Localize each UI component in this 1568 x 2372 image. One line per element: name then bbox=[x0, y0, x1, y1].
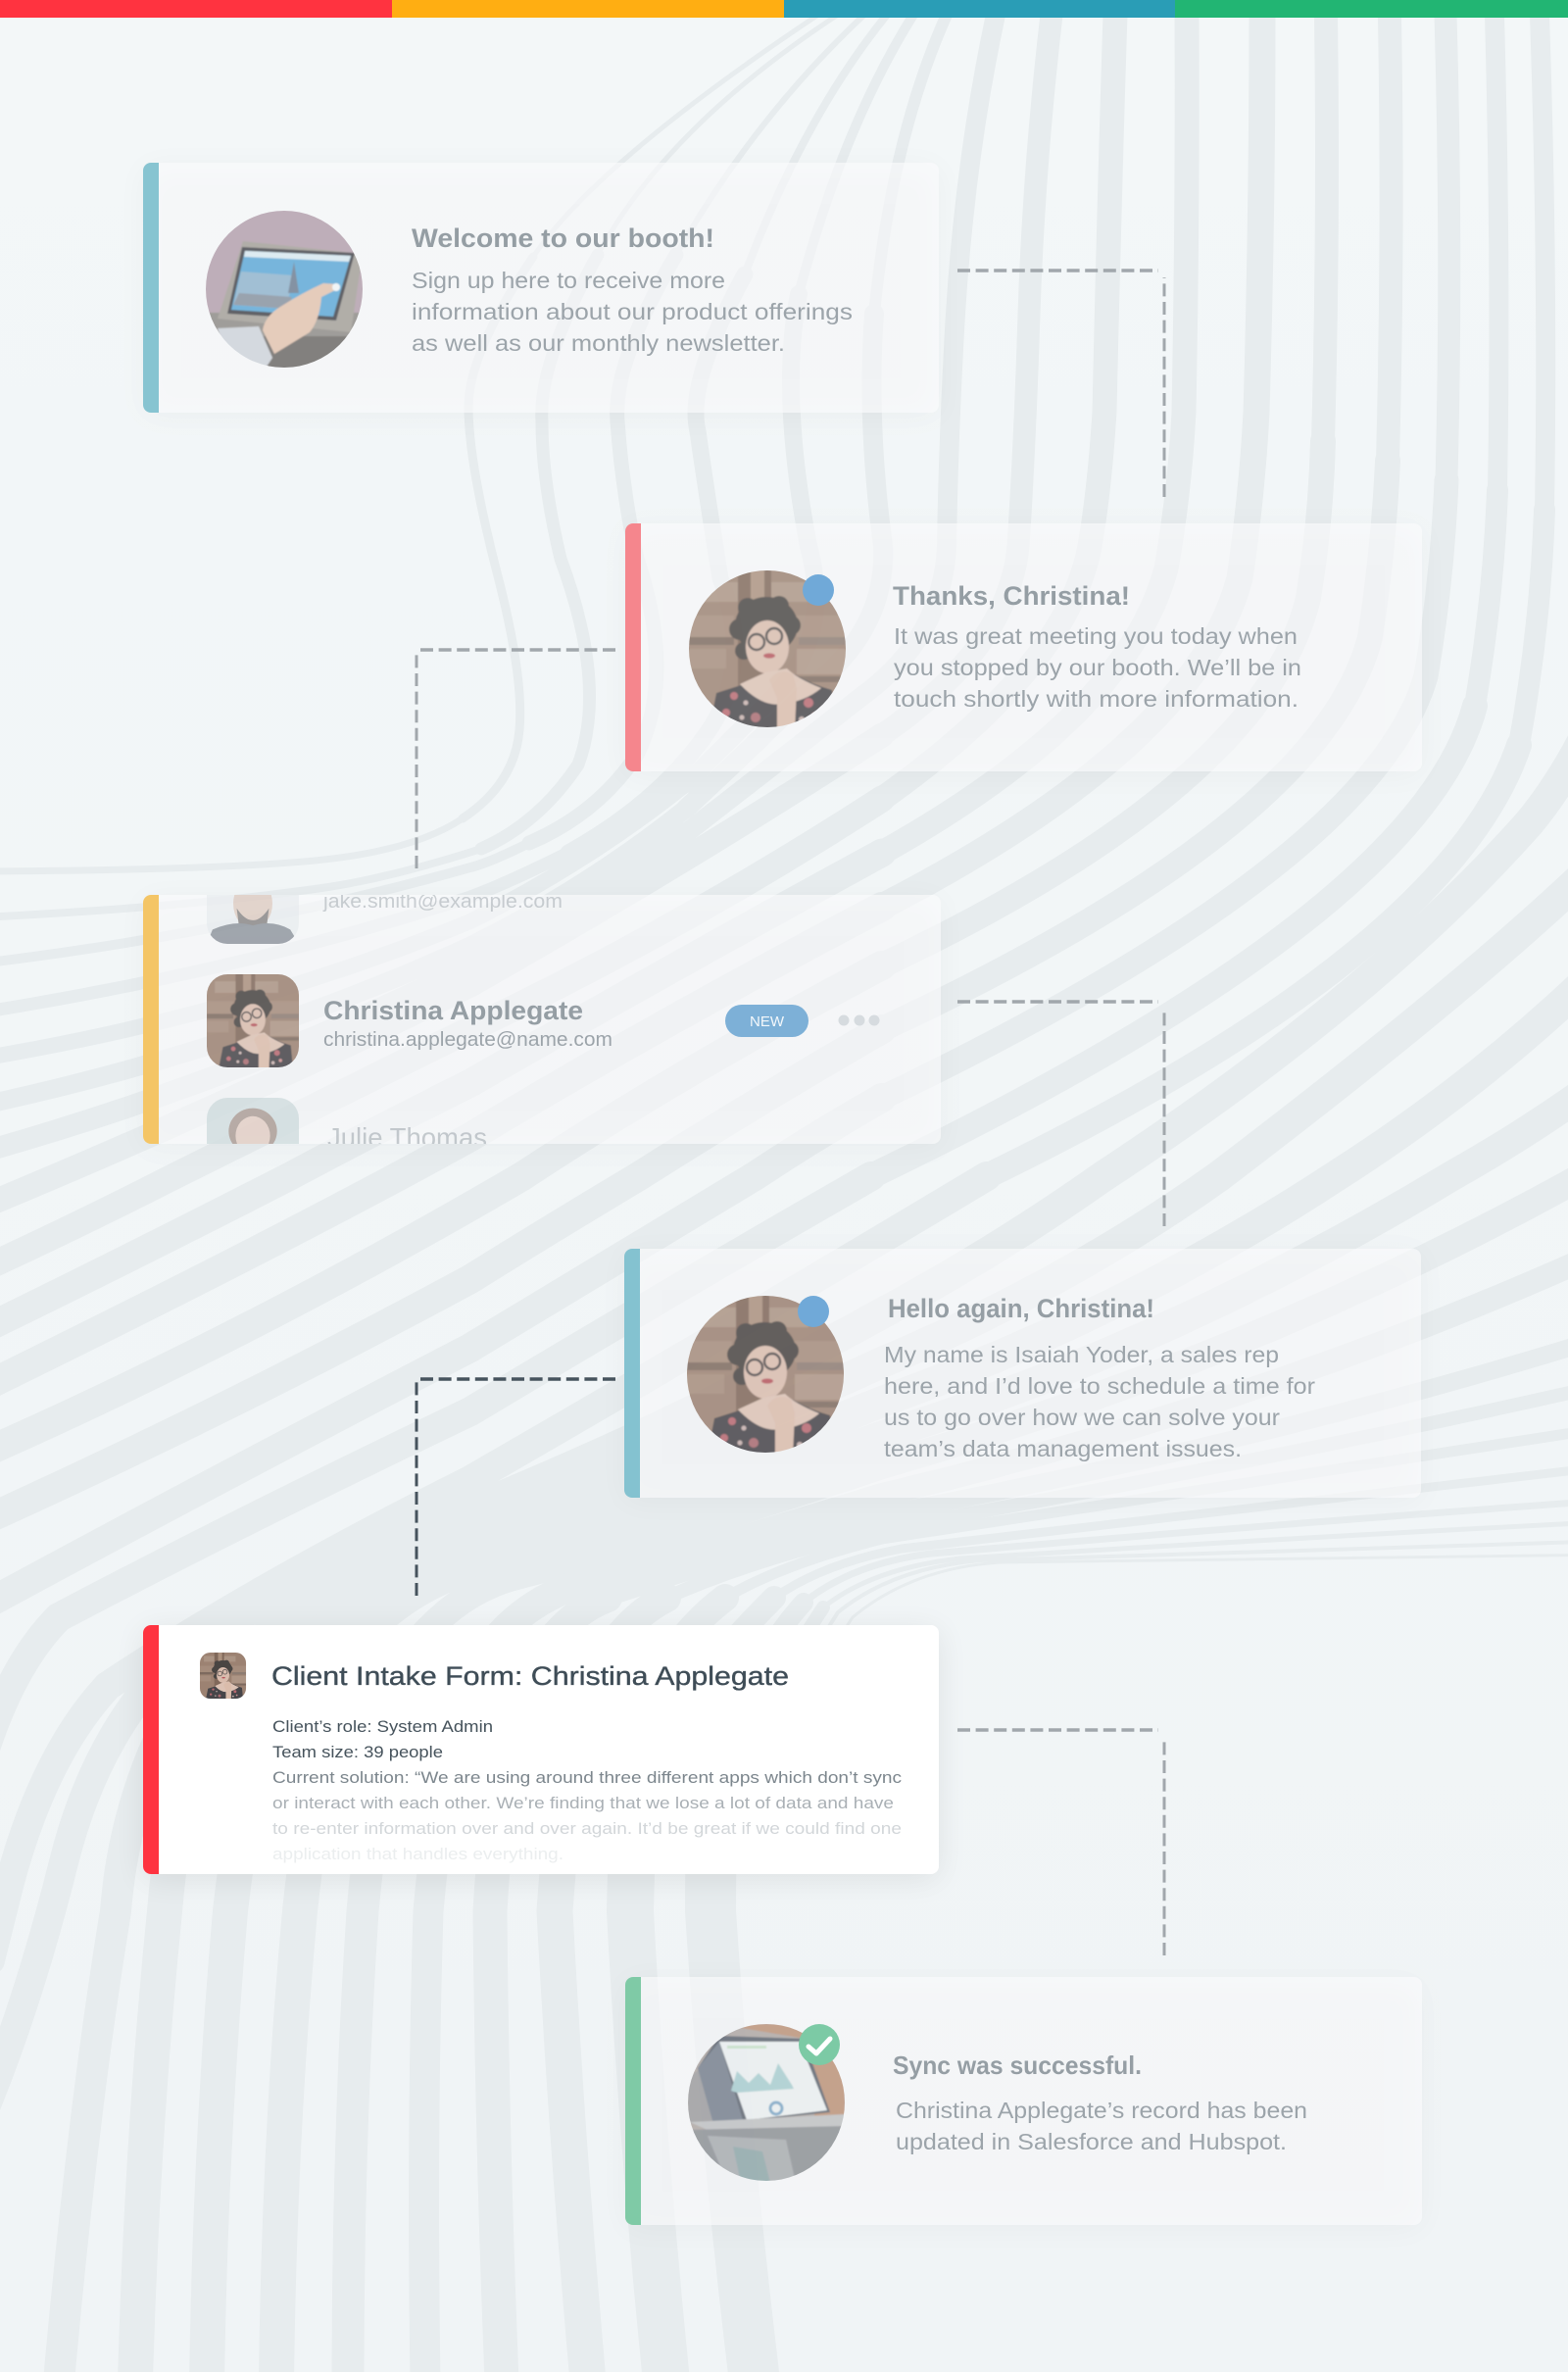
photo: tablet with hand bbox=[204, 209, 365, 375]
contact row: julie thomas (faded) bbox=[207, 1098, 486, 1144]
text: sync body bbox=[896, 2098, 1307, 2154]
contact row: julie thomas (faded): Julie Thomas bbox=[327, 1122, 487, 1153]
text: intake form body: to re-enter information over and over again. It’d be great if we could find one bbox=[272, 1820, 902, 1838]
text: intake form body: Team size: 39 people bbox=[272, 1744, 443, 1761]
avatar: christina bbox=[199, 1652, 247, 1701]
photo: christina bbox=[687, 568, 848, 732]
arrow: connector 5 to sync card bbox=[957, 1730, 1164, 1955]
photo: laptop dashboard bbox=[686, 2022, 847, 2183]
arrow: connector 4 to intake form (active) bbox=[416, 1379, 615, 1596]
contact row: christina applegate: christina.applegate@name.com bbox=[323, 1028, 612, 1051]
text: thanks body: you stopped by our booth. We’ll be in bbox=[894, 655, 1301, 680]
text: thanks body: It was great meeting you today when bbox=[894, 623, 1298, 649]
contact row: christina applegate: Christina Applegate bbox=[323, 996, 583, 1025]
icon: more dots bbox=[839, 1015, 880, 1025]
text: welcome body: as well as our monthly newsletter. bbox=[412, 330, 785, 356]
panel: hello again bbox=[624, 1249, 1421, 1502]
heading: sync: Sync was successful. bbox=[893, 2051, 1142, 2080]
badge: new: NEW bbox=[750, 1013, 785, 1030]
text: sync body: Christina Applegate’s record has been bbox=[896, 2098, 1307, 2123]
photo: christina bbox=[685, 1294, 846, 1458]
panel: thanks christina bbox=[625, 523, 1422, 775]
arrow: connector 2 to contact list bbox=[416, 650, 615, 868]
contact row: christina applegate bbox=[206, 973, 879, 1070]
text: intake form body bbox=[272, 1718, 902, 1863]
heading: intake form title: Client Intake Form: Christina Applegate bbox=[271, 1661, 789, 1691]
icon: success check bbox=[799, 2024, 840, 2065]
arrow: connector 1 to thanks card bbox=[957, 271, 1164, 497]
text: hello body: us to go over how we can solve your bbox=[884, 1405, 1280, 1430]
panel: sync successful bbox=[625, 1977, 1305, 2225]
panel: welcome to our booth bbox=[143, 163, 939, 417]
text: hello body: My name is Isaiah Yoder, a sales rep bbox=[884, 1342, 1279, 1367]
text: hello body bbox=[884, 1342, 1315, 1461]
text: welcome body: Sign up here to receive more bbox=[412, 268, 725, 293]
text: welcome body: information about our product offerings bbox=[412, 299, 853, 324]
panel: client intake form bbox=[143, 1625, 939, 1880]
icon: notification dot bbox=[798, 1296, 829, 1327]
text: intake form body: or interact with each other. We’re finding that we lose a lot of data and have bbox=[272, 1795, 894, 1812]
heading: welcome: Welcome to our booth! bbox=[412, 223, 714, 253]
icon: notification dot bbox=[803, 574, 834, 606]
text: intake form body: Client’s role: System Admin bbox=[272, 1718, 493, 1736]
text: thanks body bbox=[894, 623, 1301, 712]
text: sync body: updated in Salesforce and Hubspot. bbox=[896, 2129, 1287, 2154]
text: intake form body: Current solution: “We are using around three different apps which don’t sync bbox=[272, 1769, 902, 1787]
panel: contact list bbox=[143, 895, 941, 1144]
heading: hello: Hello again, Christina! bbox=[888, 1294, 1154, 1323]
heading: thanks: Thanks, Christina! bbox=[893, 581, 1130, 611]
text: hello body: here, and I’d love to schedule a time for bbox=[884, 1373, 1315, 1399]
top colour bar bbox=[0, 0, 1568, 18]
text: welcome body bbox=[412, 268, 853, 356]
text: thanks body: touch shortly with more information. bbox=[894, 686, 1298, 712]
contact row: jake smith (faded): jake.smith@example.com bbox=[322, 891, 563, 913]
badge: new bbox=[725, 1005, 808, 1037]
contact row: jake smith (faded) bbox=[207, 895, 561, 944]
text: hello body: team’s data management issues. bbox=[884, 1436, 1242, 1461]
arrow: connector 3 to hello card bbox=[957, 1002, 1164, 1226]
text: intake form body: application that handles everything. bbox=[272, 1846, 564, 1863]
